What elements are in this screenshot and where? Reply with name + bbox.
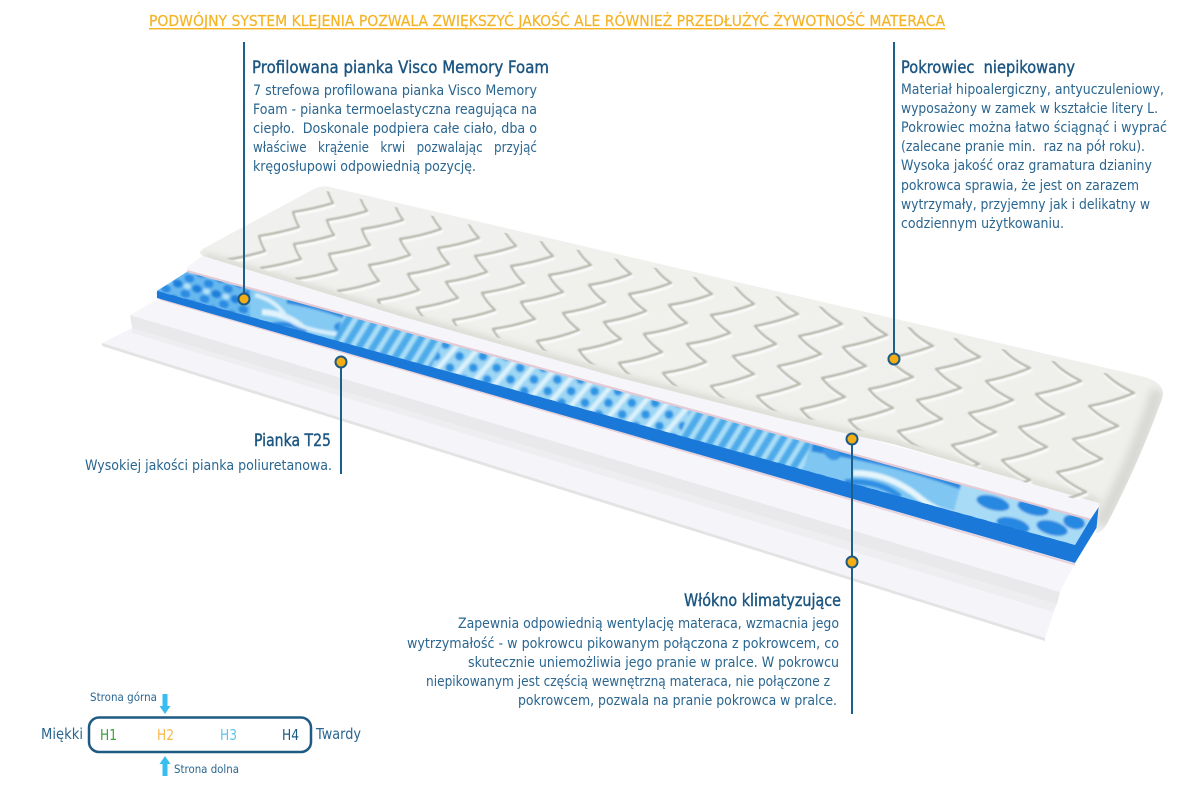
callout: Pokrowiec niepikowany: wytrzymały, przyjemny jak i delikatny w	[901, 197, 1150, 213]
callout: Włókno klimatyzujące	[407, 434, 858, 714]
quilting stitches	[191, 188, 1134, 505]
label: soft: Miękki	[41, 725, 83, 743]
callout: Włókno klimatyzujące: pokrowcem, pozwala na pranie pokrowca w pralce.	[518, 693, 837, 709]
label: top side: Strona górna	[90, 690, 157, 704]
callout: Profilowana pianka Visco Memory Foam	[238, 42, 549, 304]
firmness scale	[41, 690, 361, 776]
callout: Profilowana pianka Visco Memory Foam: kręgosłupowi odpowiednią pozycję.	[253, 159, 476, 175]
arrow: up from bottom side	[160, 756, 170, 776]
label: hard: Twardy	[315, 725, 361, 743]
label: bottom side: Strona dolna	[174, 762, 239, 776]
callout: Profilowana pianka Visco Memory Foam: ciepło. Doskonale podpiera całe ciało, dba o	[253, 121, 537, 137]
callout: Profilowana pianka Visco Memory Foam: 7 strefowa profilowana pianka Visco Memory	[253, 83, 537, 99]
label: H1: H1	[100, 726, 117, 744]
callout: Pokrowiec niepikowany: Materiał hipoalergiczny, antyuczuleniowy,	[901, 82, 1164, 98]
callout: Profilowana pianka Visco Memory Foam: Foam - pianka termoelastyczna reagująca na	[253, 102, 537, 118]
title: PODWÓJNY SYSTEM KLEJENIA POZWALA ZWIĘKSZYĆ JAKOŚĆ ALE RÓWNIEŻ PRZEDŁUŻYĆ ŻYWOTNOŚĆ MATERACA	[149, 11, 946, 30]
callout: Włókno klimatyzujące: skutecznie uniemożliwia jego pranie w pralce. W pokrowcu	[468, 655, 839, 671]
callout: Włókno klimatyzujące: niepikowanym jest częścią wewnętrzną materaca, nie połączone z	[426, 674, 830, 690]
callout: Włókno klimatyzujące: Włókno klimatyzujące	[684, 591, 841, 610]
callout: Pianka T25	[85, 356, 346, 474]
layer: quilted cover	[191, 186, 1163, 533]
mattress illustration	[102, 186, 1163, 641]
callout: Pokrowiec niepikowany: (zalecane pranie min. raz na pół roku).	[901, 139, 1145, 155]
layer: T25 foam	[130, 298, 1075, 604]
callout: Pokrowiec niepikowany: codziennym użytkowaniu.	[901, 216, 1064, 232]
callout: Pianka T25: Wysokiej jakości pianka poliuretanowa.	[85, 458, 332, 474]
callout: Pokrowiec niepikowany: Pokrowiec można łatwo ściągnąć i wyprać	[901, 120, 1167, 136]
callout: Pokrowiec niepikowany: pokrowca sprawia, że jest on zarazem	[901, 178, 1139, 194]
callout: Profilowana pianka Visco Memory Foam: właściwe krążenie krwi pozwalając przyjąć	[253, 140, 537, 156]
arrow: down to top side	[160, 694, 170, 714]
label: H3: H3	[220, 726, 237, 744]
callout: Pokrowiec niepikowany: Wysoka jakość oraz gramatura dzianiny	[901, 158, 1152, 174]
callout: Profilowana pianka Visco Memory Foam: Profilowana pianka Visco Memory Foam	[252, 58, 549, 77]
layer: white climate fibre	[187, 254, 1100, 520]
callout: Włókno klimatyzujące: Zapewnia odpowiednią wentylację materaca, wzmacnia jego	[458, 616, 839, 632]
label: H4: H4	[282, 726, 299, 744]
layer: bottom sheet	[102, 327, 1057, 641]
callout: Włókno klimatyzujące: wytrzymałość - w pokrowcu pikowanym połączona z pokrowcem, co	[407, 636, 839, 652]
callout: Pokrowiec niepikowany: wyposażony w zamek w kształcie litery L.	[901, 101, 1158, 117]
label: H2: H2	[157, 726, 174, 744]
callout: Pianka T25: Pianka T25	[254, 431, 331, 450]
layer: blue profiled visco foam	[150, 260, 1100, 563]
scale frame	[89, 718, 311, 752]
callout: Pokrowiec niepikowany: Pokrowiec niepikowany	[901, 58, 1075, 77]
callout: Pokrowiec niepikowany	[888, 42, 1167, 364]
